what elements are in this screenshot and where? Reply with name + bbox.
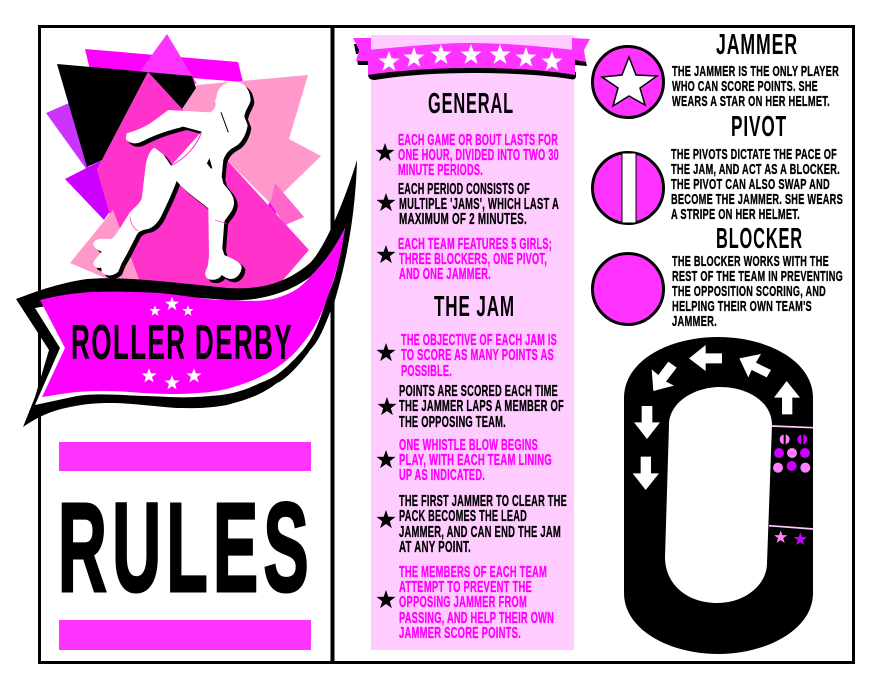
heading: pivot: PIVOT <box>731 111 787 143</box>
blocker description: JAMMER. <box>672 314 717 330</box>
arrows: direction of play <box>633 345 800 490</box>
bullet: lead jammer: AT ANY POINT. <box>399 539 471 556</box>
bullet: team members: THE MEMBERS OF EACH TEAM <box>399 564 547 581</box>
panel: title column artwork <box>46 34 321 295</box>
panel: blocker <box>592 223 843 330</box>
bullet: game length: ONE HOUR, DIVIDED INTO TWO 30 <box>398 147 559 164</box>
bullet: objective: TO SCORE AS MANY POINTS AS <box>401 347 554 364</box>
icon: blocker helmet <box>592 254 664 324</box>
banner title: ROLLER DERBY <box>71 316 293 370</box>
bullet: game length <box>375 132 559 179</box>
bullet: scoring: THE JAMMER LAPS A MEMBER OF <box>399 398 564 415</box>
track diagram <box>624 337 813 654</box>
bullet: periods: MULTIPLE 'JAMS', WHICH LAST A <box>399 196 559 213</box>
bullet: team members <box>376 564 554 642</box>
blocker description: HELPING THEIR OWN TEAM'S <box>672 299 812 315</box>
bullet: objective: THE OBJECTIVE OF EACH JAM IS <box>401 332 557 349</box>
ribbon with stars <box>353 38 590 80</box>
bullet: periods: EACH PERIOD CONSISTS OF <box>398 181 530 198</box>
icon: jammer helmet star <box>592 46 664 118</box>
bullet: whistle: UP AS INDICATED. <box>399 467 485 484</box>
bullet: periods: MAXIMUM OF 2 MINUTES. <box>399 211 527 228</box>
jammers <box>774 530 807 545</box>
heading: general: GENERAL <box>428 88 514 120</box>
bullet: scoring: THE OPPOSING TEAM. <box>399 414 506 431</box>
bullet: lead jammer: THE FIRST JAMMER TO CLEAR THE <box>399 493 567 510</box>
heading: rules: RULES <box>58 477 314 618</box>
panel: pivot <box>592 111 843 224</box>
track surface <box>624 337 813 654</box>
icon: pivot helmet stripe <box>592 152 664 224</box>
column divider <box>330 27 334 663</box>
bullet: whistle: PLAY, WITH EACH TEAM LINING <box>399 452 552 469</box>
bullet: teams <box>376 236 552 283</box>
bullet: periods <box>376 181 559 228</box>
bullet: scoring <box>377 383 564 431</box>
bullet: teams: THREE BLOCKERS, ONE PIVOT, <box>399 251 547 268</box>
bullet: team members: PASSING, AND HELP THEIR OWN <box>399 610 554 627</box>
decorative bar top <box>59 442 311 471</box>
heading: jammer: JAMMER <box>716 29 798 61</box>
bullet: team members: JAMMER SCORE POINTS. <box>399 625 521 642</box>
heading: blocker: BLOCKER <box>716 223 803 255</box>
panel: jammer <box>592 29 839 118</box>
bullet: team members: OPPOSING JAMMER FROM <box>399 594 527 611</box>
blocker description <box>672 254 843 330</box>
bullet: scoring: POINTS ARE SCORED EACH TIME <box>399 383 558 400</box>
background geometric shapes <box>46 34 321 295</box>
panel: rules text column <box>371 35 574 650</box>
bullet: objective: POSSIBLE. <box>401 363 452 380</box>
bullet: objective <box>376 332 557 380</box>
bullet: whistle: ONE WHISTLE BLOW BEGINS <box>399 437 538 454</box>
skater silhouette <box>93 82 254 283</box>
banner stars <box>141 296 202 389</box>
track lines: pack zone <box>769 426 813 529</box>
bullet: lead jammer: PACK BECOMES THE LEAD <box>399 508 527 525</box>
bullet: teams: EACH TEAM FEATURES 5 GIRLS; <box>398 236 552 253</box>
banner: Roller Derby pennant <box>16 160 357 427</box>
jammer description <box>672 64 839 110</box>
decorative bar bottom <box>59 620 311 650</box>
bullet: team members: ATTEMPT TO PREVENT THE <box>399 579 532 596</box>
ribbon stars <box>379 44 562 71</box>
heading: the jam: THE JAM <box>434 291 515 323</box>
blockers <box>773 448 810 473</box>
bullet: lead jammer: JAMMER, AND CAN END THE JAM <box>399 524 561 541</box>
bullet: game length: EACH GAME OR BOUT LASTS FOR <box>398 132 558 149</box>
pivots <box>780 434 807 444</box>
bullet: lead jammer <box>376 493 567 556</box>
bullet: game length: MINUTE PERIODS. <box>398 162 483 179</box>
pivot description: A STRIPE ON HER HELMET. <box>671 207 800 223</box>
pivot description <box>671 147 843 223</box>
bullet: whistle <box>376 437 552 484</box>
bullet: teams: AND ONE JAMMER. <box>399 266 491 283</box>
